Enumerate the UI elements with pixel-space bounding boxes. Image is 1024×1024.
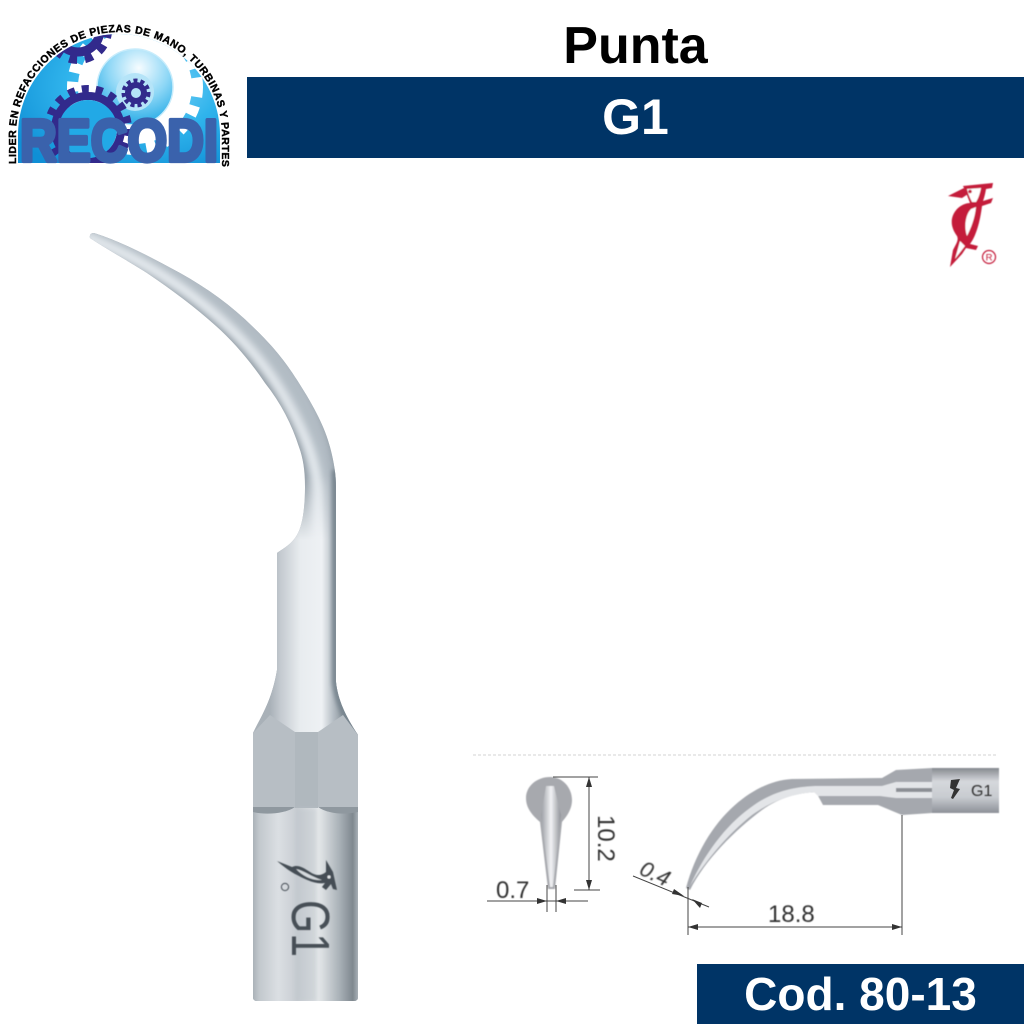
woodpecker eye [968, 190, 972, 193]
logo: RECODI [8, 24, 230, 174]
diagram top dotted edge [473, 754, 998, 756]
main product: ultrasonic tip [80, 225, 370, 1005]
woodpecker beak [948, 188, 968, 198]
dimension 0.4: 0.4 [636, 856, 674, 891]
dimension 0.7: 0.7 [496, 877, 529, 904]
logo dome background [18, 34, 220, 163]
woodpecker body [950, 183, 993, 267]
engraved label G1: G1 [280, 900, 340, 957]
dimension 10.2: 10.2 [592, 815, 619, 862]
hex facets [253, 715, 295, 807]
dimension lines [487, 777, 902, 935]
woodpecker white tail wedge [955, 241, 965, 259]
cylindrical shank [253, 807, 358, 1001]
header bar: G1 [247, 77, 1024, 158]
title: Punta: Punta [563, 17, 708, 75]
woodpecker white face [967, 188, 981, 202]
code box: Cod. 80-13: Cod. 80-13 [744, 968, 977, 1020]
logo arc text: LIDER EN REFACCIONES DE PIEZAS DE MANO, TURBINAS Y PARTES [8, 24, 230, 167]
code box: Cod. 80-13 [697, 964, 1024, 1024]
header bar: G1: G1 [602, 89, 669, 145]
registered mark: R [986, 252, 993, 264]
woodpecker white breast [965, 207, 976, 236]
side view of tip [686, 768, 999, 890]
logo gears [46, 34, 203, 163]
straight neck [253, 482, 358, 735]
brand icon: woodpecker [948, 183, 996, 267]
side view engraved G1: G1 [971, 783, 992, 800]
dimension arrowheads [537, 777, 902, 930]
logo wordmark: RECODI [20, 108, 218, 174]
front view of tip [526, 777, 572, 889]
dimension diagram [473, 755, 999, 935]
engraved woodpecker mark [277, 860, 337, 891]
dimension 18.8: 18.8 [768, 901, 815, 928]
tip body shading [80, 225, 370, 1005]
side view engraved mark [950, 779, 960, 799]
